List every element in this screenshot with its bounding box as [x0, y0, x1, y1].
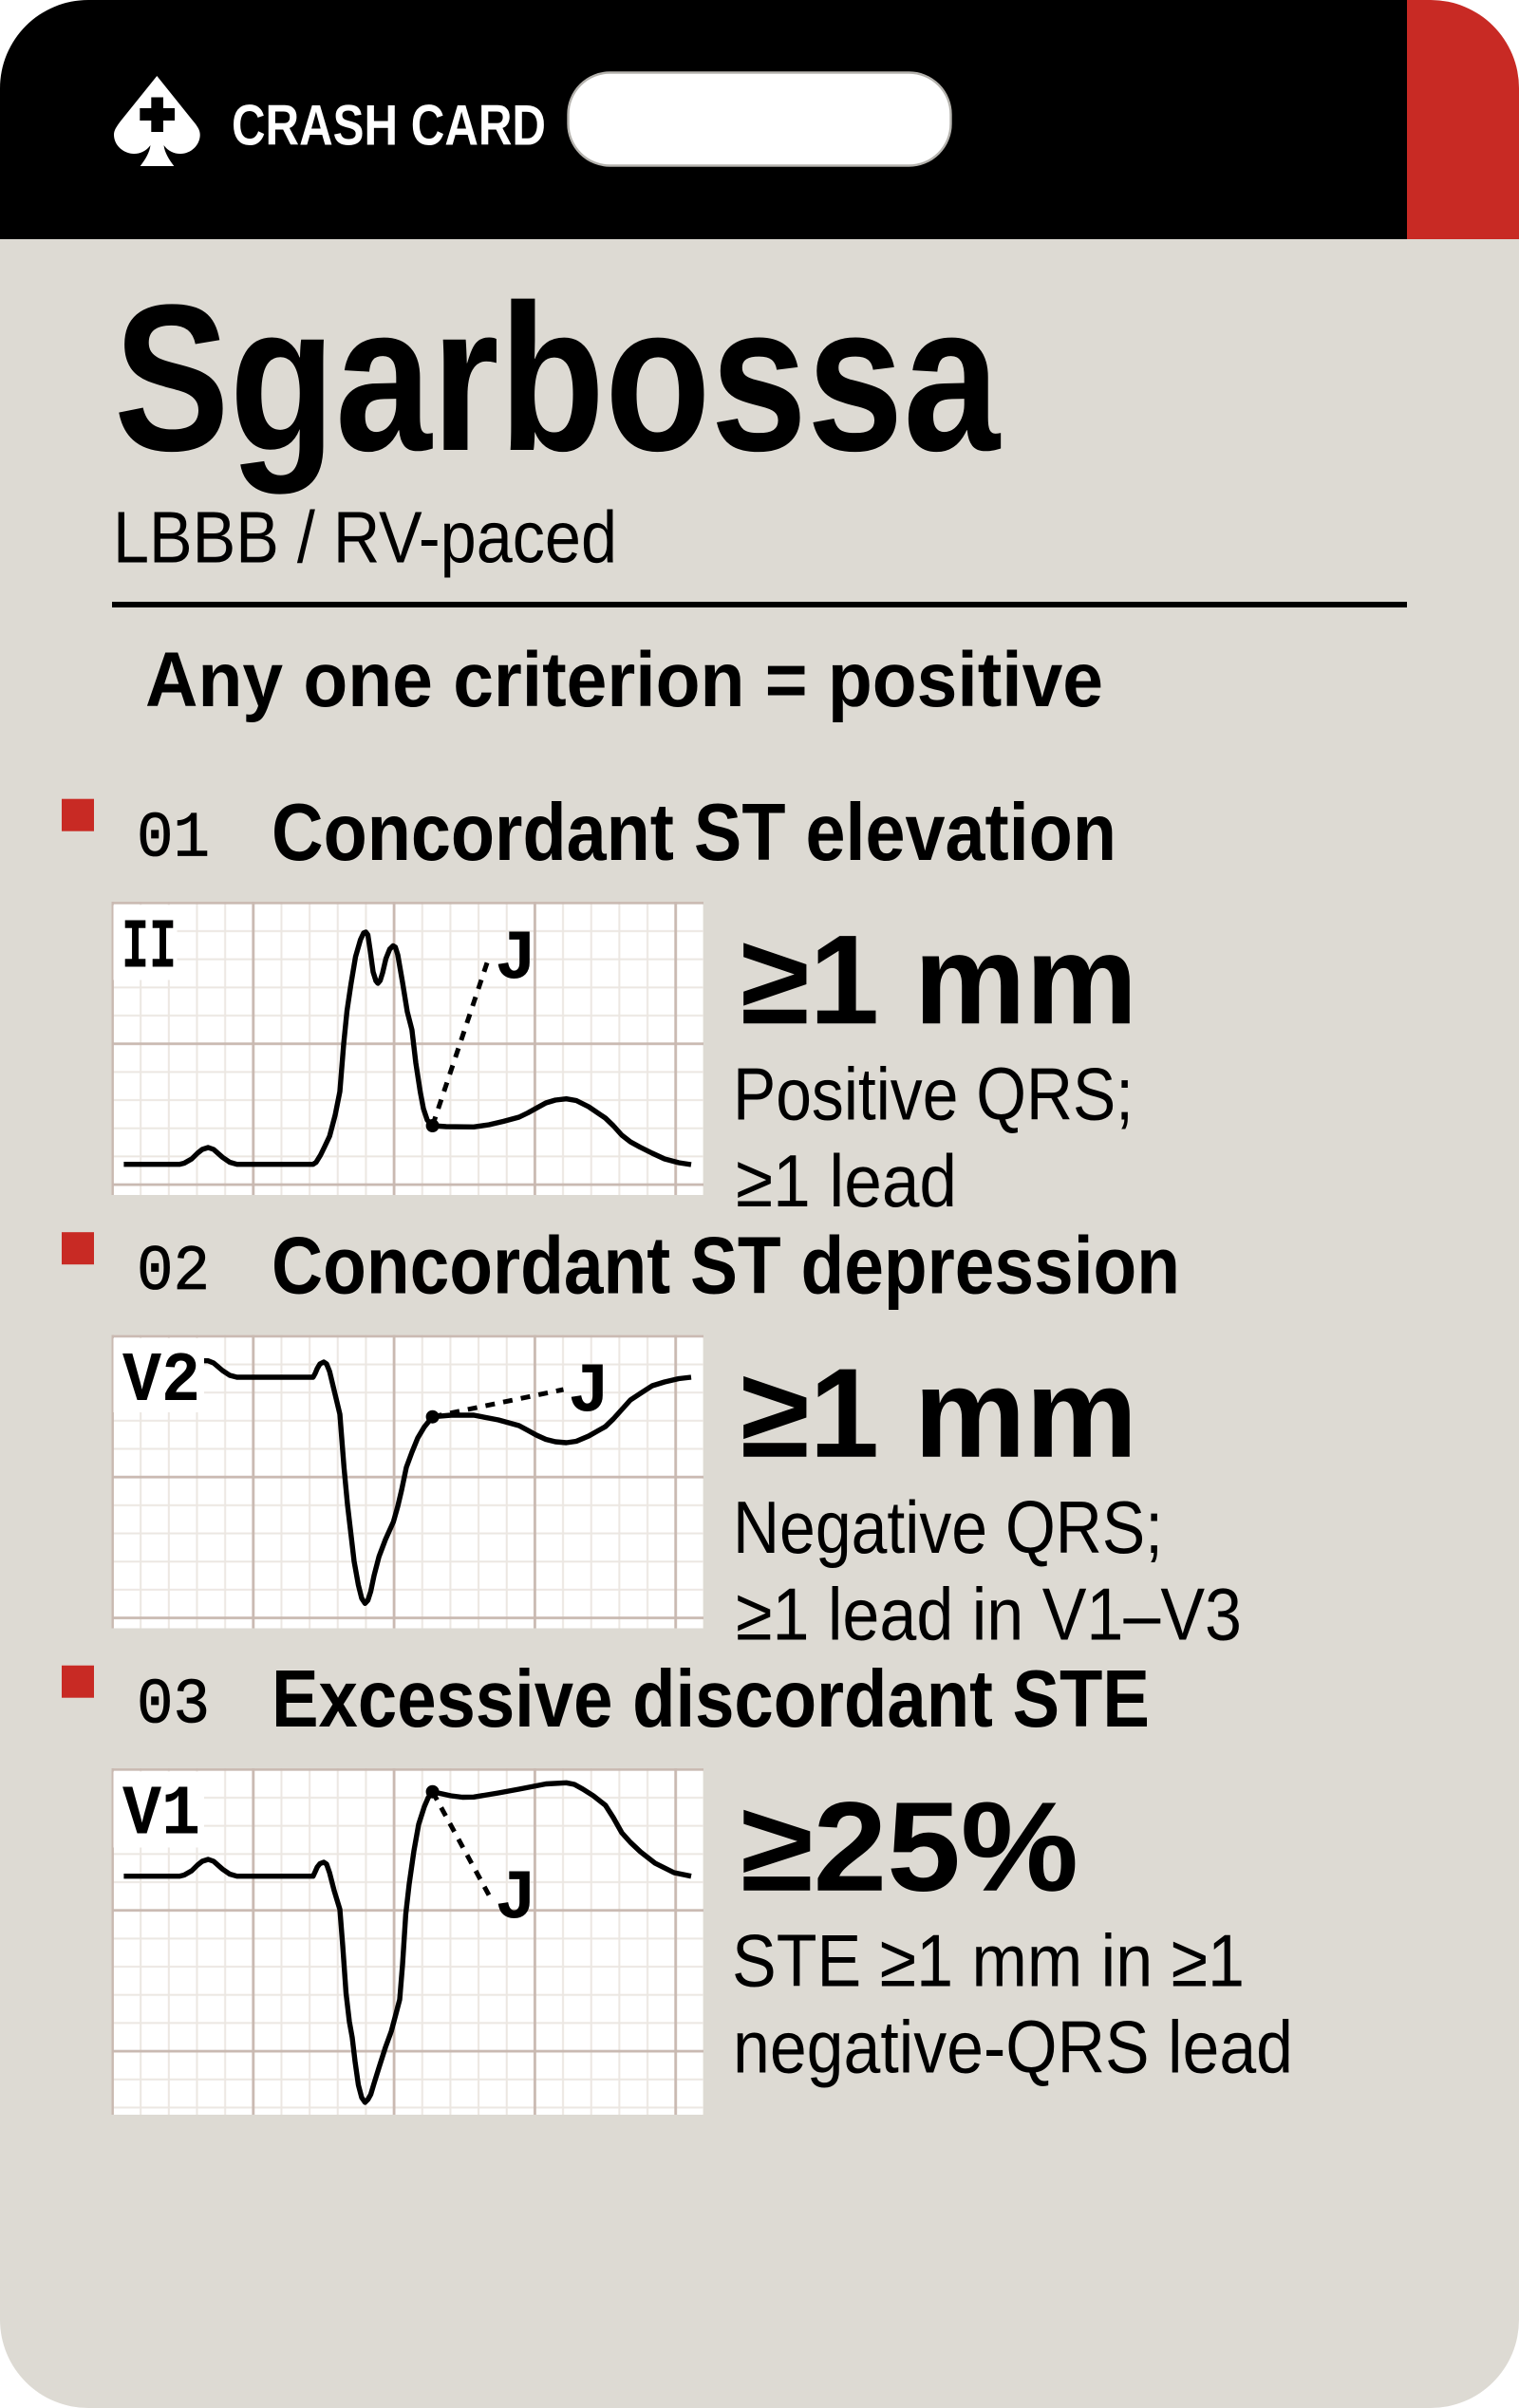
- threshold 03: ≥25%: [741, 1777, 1078, 1918]
- heading 02: Concordant ST depression: [272, 1221, 1180, 1312]
- chart: lead V2 ECG: [112, 1335, 703, 1629]
- description 01: Positive QRS;: [733, 1052, 1134, 1135]
- heading 01: Concordant ST elevation: [272, 788, 1116, 878]
- chart: lead II ECG: II: [122, 909, 177, 989]
- description 03: STE ≥1 mm in ≥1: [732, 1918, 1245, 2002]
- threshold 02: ≥1 mm: [741, 1343, 1137, 1484]
- heading 03: Excessive discordant STE: [272, 1654, 1150, 1745]
- red corner tab: [1407, 0, 1519, 239]
- chart: lead V1 ECG: V1: [122, 1776, 200, 1856]
- icon: spade with medical cross: [114, 76, 200, 166]
- description 02: ≥1 lead in V1–V3: [736, 1572, 1242, 1655]
- chart: lead II ECG: [112, 902, 703, 1195]
- chart: lead II ECG: J: [495, 921, 536, 1000]
- chart: lead V2 ECG: J: [568, 1353, 609, 1433]
- chart: lead V1 ECG: [112, 1768, 703, 2115]
- blank name pill: [568, 72, 951, 165]
- title: Sgarbossa: [114, 261, 1001, 495]
- threshold 01: ≥1 mm: [741, 909, 1137, 1051]
- title rule: [112, 602, 1407, 607]
- chart: lead V1 ECG: J: [495, 1860, 536, 1940]
- red marker 01: [62, 799, 94, 831]
- chart: lead V2 ECG: V2: [122, 1342, 200, 1422]
- number 01: 01: [137, 803, 210, 875]
- rule statement: Any one criterion = positive: [145, 637, 1103, 723]
- panel: criterion 02: [62, 1221, 1242, 1655]
- header band: [0, 0, 1519, 239]
- brand label: CRASH CARD: [232, 94, 546, 158]
- description 01: [733, 1052, 1134, 1223]
- red marker 02: [62, 1232, 94, 1264]
- description 03: negative-QRS lead: [733, 2005, 1293, 2088]
- red marker 03: [62, 1666, 94, 1698]
- number 03: 03: [137, 1669, 210, 1743]
- panel: criterion 03: [62, 1654, 1293, 2115]
- description 03: [732, 1918, 1293, 2088]
- subtitle: LBBB / RV-paced: [113, 497, 617, 579]
- description 01: ≥1 lead: [736, 1139, 957, 1223]
- panel: criterion 01: [62, 788, 1137, 1223]
- description 02: Negative QRS;: [733, 1485, 1163, 1569]
- number 02: 02: [137, 1236, 210, 1309]
- description 02: [733, 1485, 1242, 1655]
